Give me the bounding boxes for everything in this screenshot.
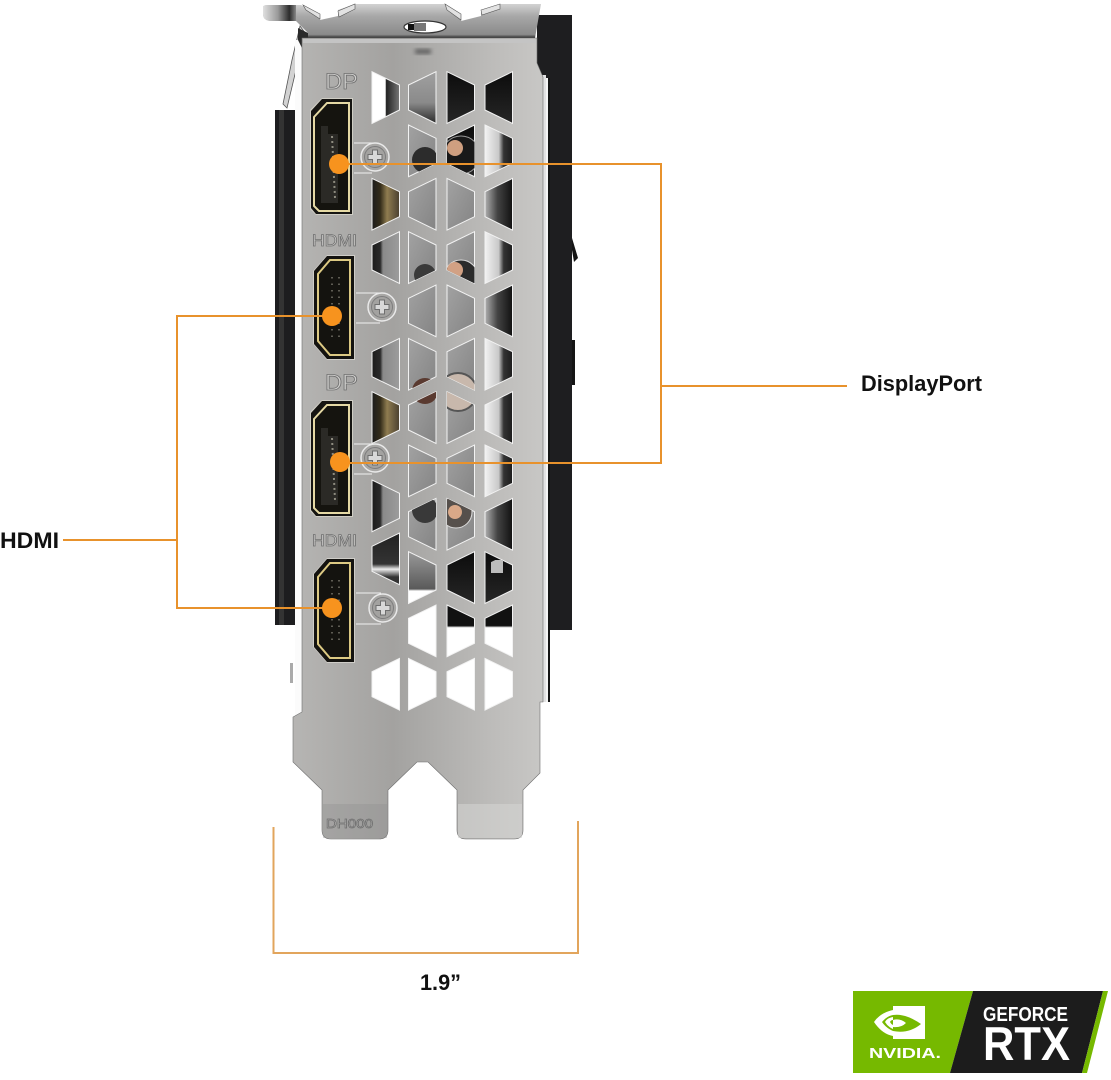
screw, upper left [361,143,389,171]
label: DisplayPort: DisplayPort [861,371,983,396]
screw bracket lines [354,143,381,624]
screw, second [368,293,396,321]
HDMI leader lines [63,316,332,608]
screw, fourth [369,594,397,622]
HDMI connector, lower [313,558,355,663]
DisplayPort connector, upper [310,98,353,215]
width label: 1.9” [420,970,461,995]
graphics card bracket [263,4,578,839]
NVIDIA GeForce RTX badge [853,991,1108,1073]
bracket top flange [263,4,541,48]
port labels engraved on bracket: HDMI [312,231,357,250]
bracket plate [293,38,543,839]
GEFORCE wordmark: GEFORCE [983,1004,1068,1026]
port labels engraved on bracket: DP [325,69,358,94]
vent hole grid [372,72,512,710]
plate upper highlight and smudge [303,39,536,54]
port labels engraved on bracket [312,69,373,831]
screw, third [361,444,389,472]
badge green sliver [1082,991,1108,1073]
port labels engraved on bracket: DP [325,370,358,395]
label: HDMI: HDMI [0,528,59,553]
DisplayPort connector, lower [310,400,353,517]
card body behind the bracket [275,15,578,717]
DisplayPort leader lines [339,164,847,463]
badge green panel [853,991,973,1073]
heat pipes and coils seen through the vents [412,136,503,573]
bracket tab shading [323,804,522,838]
callout dots on connectors [322,154,350,618]
NVIDIA wordmark: NVIDIA. [869,1045,941,1062]
port labels engraved on bracket: DH000 [326,816,373,831]
port labels engraved on bracket: HDMI [312,531,357,550]
badge black panel [950,991,1103,1073]
RTX wordmark: RTX [983,1017,1070,1070]
NVIDIA eye logo [874,1006,925,1039]
HDMI connector, upper [313,255,355,360]
width dimension bracket [274,821,578,953]
